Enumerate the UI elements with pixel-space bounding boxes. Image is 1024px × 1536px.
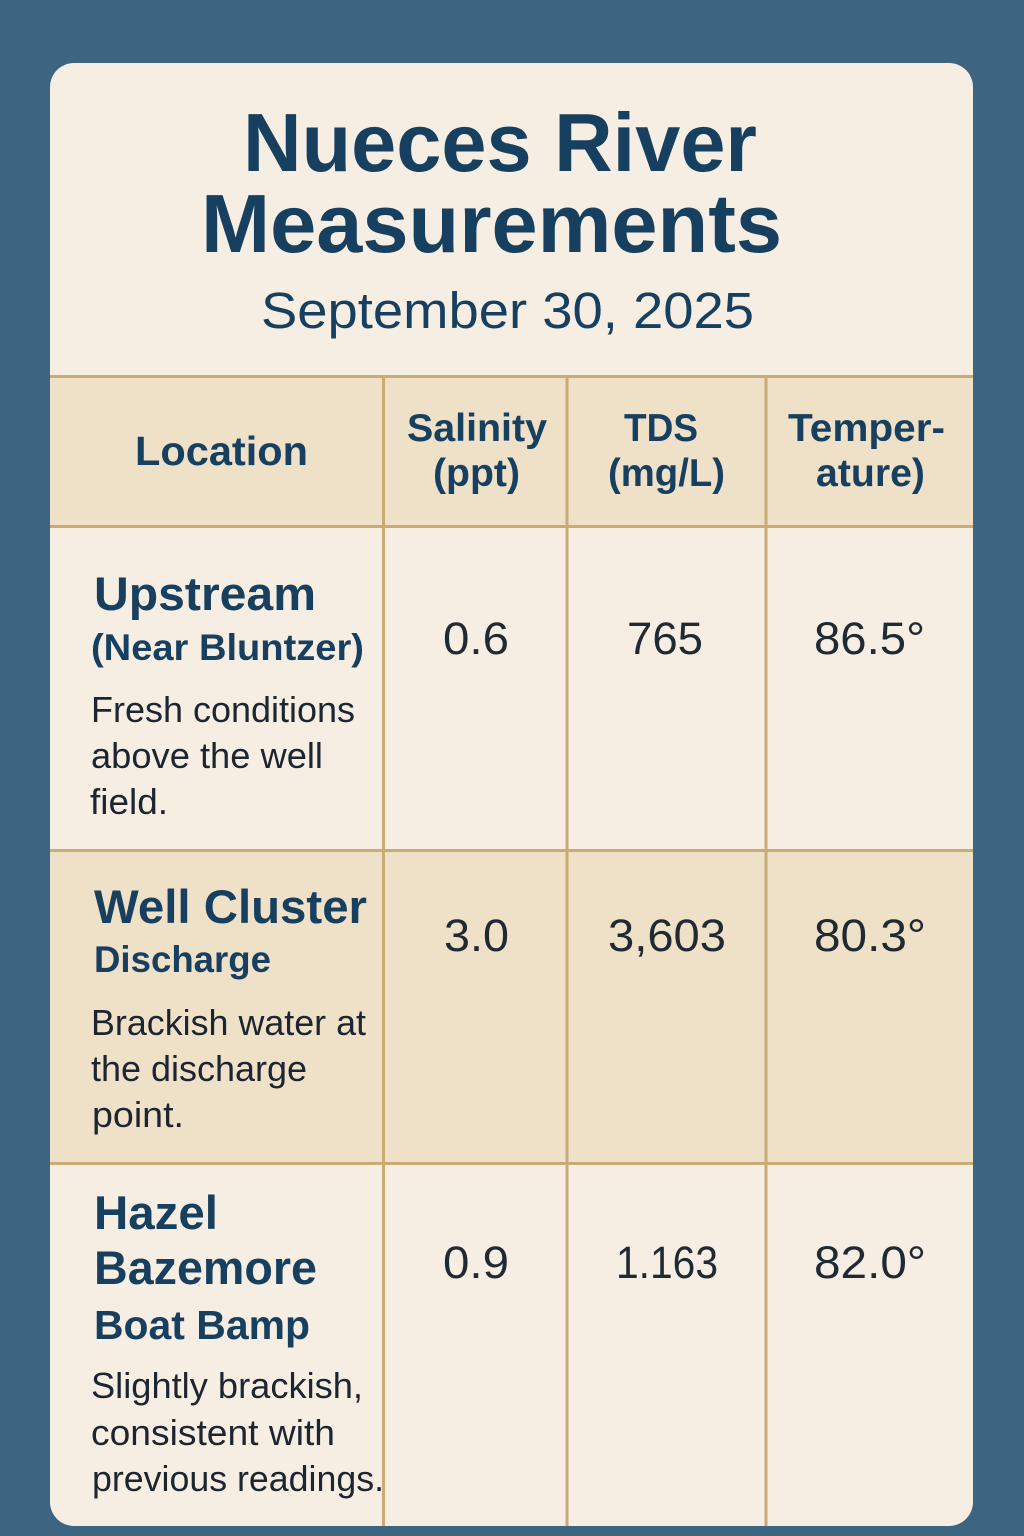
value: salinity upstream: 0.6 <box>443 613 509 664</box>
description: upstream: field. <box>90 781 168 822</box>
header: location: Location <box>135 428 308 474</box>
row: hazel bazemore <box>91 1186 926 1499</box>
table <box>50 375 973 1526</box>
title <box>201 96 782 270</box>
subtitle: date: September 30, 2025 <box>261 282 754 339</box>
description: well cluster: point. <box>92 1094 184 1135</box>
location: well cluster: Well Cluster <box>94 880 367 933</box>
location: upstream: (Near Bluntzer) <box>91 627 364 668</box>
header: salinity: (ppt) <box>433 452 520 495</box>
description: upstream <box>90 696 354 814</box>
value: temperature well cluster: 80.3° <box>814 910 926 961</box>
description: well cluster: Brackish water at <box>91 1002 366 1043</box>
location: upstream <box>92 578 362 668</box>
location: upstream: Upstream <box>94 567 316 620</box>
value: salinity hazel bazemore: 0.9 <box>443 1237 509 1288</box>
value: temperature hazel bazemore: 82.0° <box>814 1237 926 1288</box>
header: TDS: TDS <box>624 407 698 450</box>
description: hazel bazemore: previous readings. <box>92 1458 384 1499</box>
description: hazel bazemore: consistent with <box>91 1412 335 1453</box>
location: hazel bazemore: Hazel <box>94 1186 218 1239</box>
description: upstream: Fresh conditions <box>91 689 355 730</box>
location: hazel bazemore: Boat Bamp <box>94 1302 310 1348</box>
header: temperature <box>788 407 945 495</box>
location: hazel bazemore: Bazemore <box>94 1241 317 1294</box>
header: salinity <box>407 407 547 495</box>
value: TDS upstream: 765 <box>627 613 703 664</box>
description: upstream: above the well <box>91 735 323 776</box>
description: well cluster <box>91 1002 366 1135</box>
header: TDS: (mg/L) <box>608 452 725 495</box>
header: temperature: ature) <box>816 452 925 495</box>
value: salinity well cluster: 3.0 <box>444 910 509 961</box>
location: well cluster <box>94 880 367 980</box>
value: TDS well cluster: 3,603 <box>608 910 726 961</box>
row: upstream <box>90 567 925 822</box>
well cluster row background <box>50 851 973 1163</box>
row: well cluster discharge <box>91 880 926 1135</box>
header: TDS <box>610 414 724 494</box>
description: well cluster: the discharge <box>91 1048 307 1089</box>
description: hazel bazemore <box>91 1365 384 1499</box>
title: Measurements <box>201 177 782 270</box>
location: well cluster: Discharge <box>94 939 271 980</box>
header row background <box>50 377 973 526</box>
value: TDS hazel bazemore: 1.163 <box>616 1237 718 1288</box>
header: salinity: Salinity <box>407 407 547 450</box>
description: hazel bazemore: Slightly brackish, <box>91 1365 363 1406</box>
table header <box>135 407 945 495</box>
location: hazel bazemore <box>94 1186 317 1348</box>
header: temperature: Temper- <box>788 407 945 450</box>
title: Nueces River <box>243 96 757 189</box>
value: temperature upstream: 86.5° <box>814 613 925 664</box>
